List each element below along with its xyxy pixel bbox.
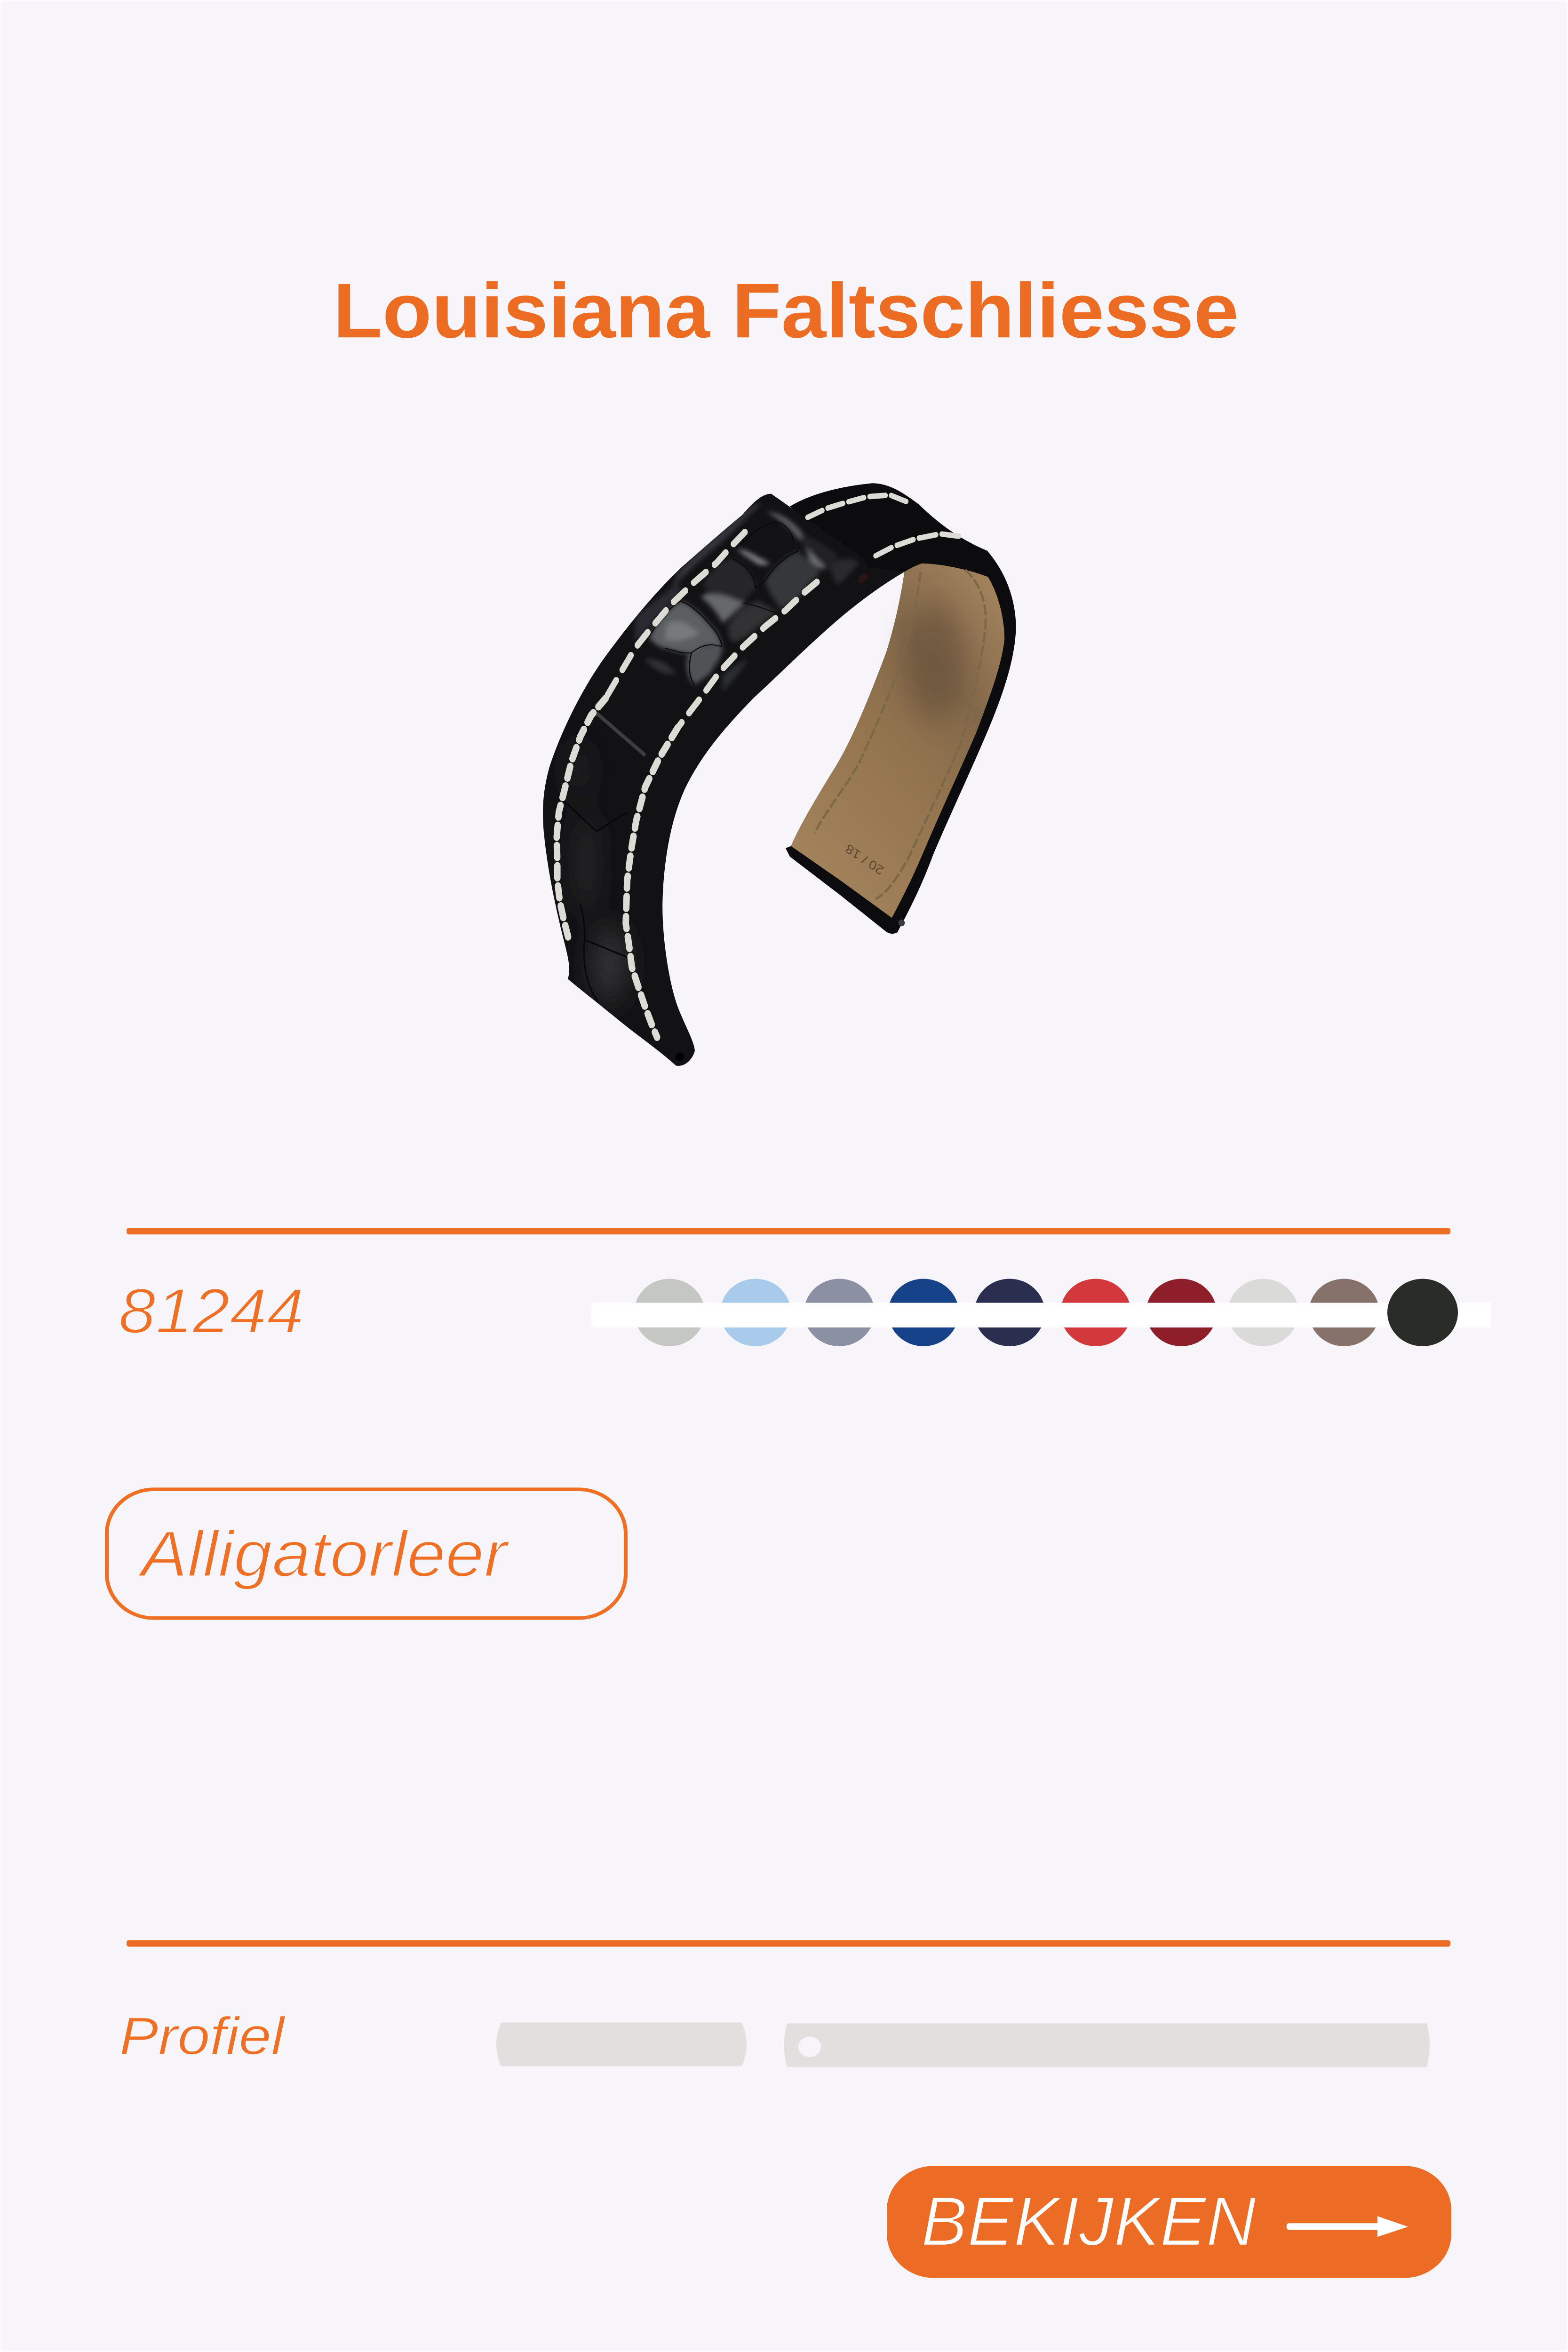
long bar bbox=[784, 2024, 1430, 2067]
lining shadow bbox=[904, 601, 966, 720]
button background bbox=[887, 2166, 1451, 2278]
leather grain cells bbox=[635, 503, 860, 692]
swatch: black selected bbox=[1387, 1279, 1458, 1346]
strap tan lining bbox=[791, 564, 1004, 918]
lower tip hole bbox=[676, 1052, 684, 1061]
strap back rim bbox=[786, 483, 1016, 934]
swatch: blue bbox=[888, 1279, 959, 1346]
swatch: navy bbox=[974, 1279, 1045, 1346]
strap front face bbox=[543, 494, 904, 1066]
arrow icon bbox=[1286, 2216, 1408, 2237]
tag outline bbox=[107, 1489, 626, 1618]
material tag bbox=[107, 1489, 626, 1618]
title: Louisiana Faltschliesse bbox=[333, 268, 1239, 354]
divider line top bbox=[127, 1228, 1450, 1234]
white stitching bbox=[557, 495, 960, 1037]
swatch: grey bbox=[634, 1279, 705, 1346]
colour swatches bbox=[591, 1279, 1491, 1346]
size marking on lining: 20 / 18 bbox=[844, 841, 886, 878]
strap details bbox=[557, 495, 960, 1061]
article number: 81244 bbox=[119, 1275, 304, 1346]
call to action button bbox=[887, 2166, 1451, 2278]
swatch: burgundy bbox=[1146, 1279, 1217, 1346]
keeper fold line bbox=[597, 713, 645, 755]
white band across swatches bbox=[591, 1303, 1491, 1327]
profile shape: long strap end bbox=[784, 2024, 1430, 2067]
tag label: Alligatorleer bbox=[137, 1518, 510, 1590]
lining stitches bbox=[814, 570, 986, 899]
swatch: light grey bbox=[1228, 1279, 1298, 1346]
strap hole bbox=[798, 2037, 821, 2057]
lower scale line bbox=[581, 905, 629, 1002]
keeper hole bbox=[857, 572, 869, 585]
swatch: light blue bbox=[720, 1279, 791, 1346]
lower strap sheen bbox=[566, 740, 627, 1002]
back end hole bbox=[898, 920, 905, 926]
leather scale lines bbox=[649, 522, 798, 685]
strap back and lining bbox=[543, 483, 1016, 1066]
swatch: red bbox=[1060, 1279, 1131, 1346]
mid scale line bbox=[562, 800, 627, 831]
profile label: Profiel bbox=[119, 2007, 286, 2066]
button label: BEKIJKEN bbox=[921, 2183, 1256, 2260]
divider line bottom bbox=[127, 1940, 1450, 1947]
swatch: slate bbox=[804, 1279, 875, 1346]
swatch: taupe bbox=[1309, 1279, 1379, 1346]
product photo: leather watch strap bbox=[543, 483, 1016, 1066]
clipped leather shading bbox=[566, 503, 860, 1002]
profile shape: short strap end bbox=[496, 2023, 747, 2066]
